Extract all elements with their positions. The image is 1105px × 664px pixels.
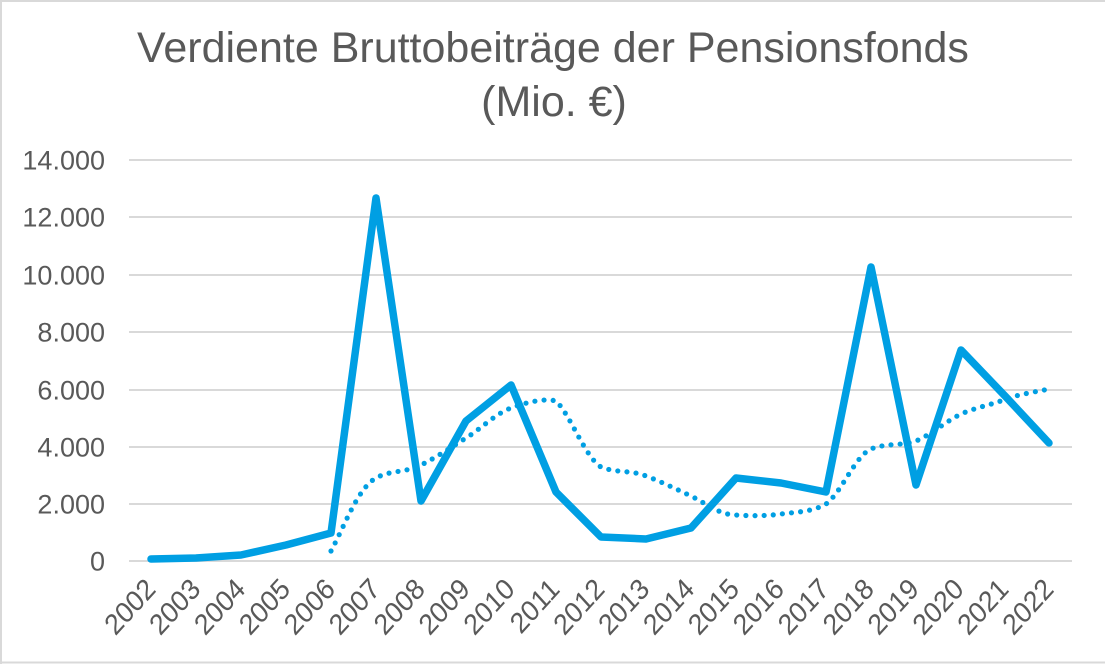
x axis labels: 2020	[907, 572, 969, 641]
x axis labels: 2008	[368, 572, 430, 641]
y axis labels: 0	[90, 546, 105, 576]
x axis labels: 2005	[233, 572, 296, 641]
x axis labels: 2010	[458, 572, 520, 641]
main line: gross premiums earned	[151, 198, 1049, 559]
y axis labels: 14.000	[22, 146, 105, 176]
x axis labels: 2003	[143, 572, 206, 641]
x axis labels: 2014	[637, 572, 700, 641]
title: (Mio. €)	[481, 78, 627, 126]
title: Verdiente Bruttobeiträge der Pensionsfonds	[137, 24, 969, 72]
y axis labels: 2.000	[37, 490, 105, 520]
y axis labels: 8.000	[37, 318, 105, 348]
x axis labels: 2011	[504, 572, 565, 639]
trend line: moving average (dotted)	[331, 389, 1049, 551]
x axis labels: 2002	[99, 572, 161, 641]
x axis labels: 2006	[278, 572, 341, 641]
y axis labels: 12.000	[22, 202, 105, 232]
x axis labels: 2016	[727, 572, 790, 641]
x axis labels: 2019	[862, 572, 924, 641]
y axis labels	[22, 146, 105, 576]
title	[137, 24, 969, 126]
x axis labels: 2018	[817, 572, 879, 641]
y axis labels: 10.000	[22, 260, 105, 290]
x axis labels: 2013	[592, 572, 655, 641]
x axis labels: 2017	[772, 572, 835, 641]
x axis labels: 2021	[952, 572, 1014, 641]
x axis labels: 2007	[323, 572, 386, 641]
x axis labels	[99, 572, 1059, 641]
y axis labels: 6.000	[37, 376, 105, 406]
x axis labels: 2009	[413, 572, 475, 641]
x axis labels: 2022	[997, 572, 1059, 641]
x axis labels: 2015	[682, 572, 745, 641]
y axis labels: 4.000	[37, 432, 105, 462]
x axis labels: 2004	[188, 572, 251, 641]
x axis labels: 2012	[548, 572, 610, 641]
